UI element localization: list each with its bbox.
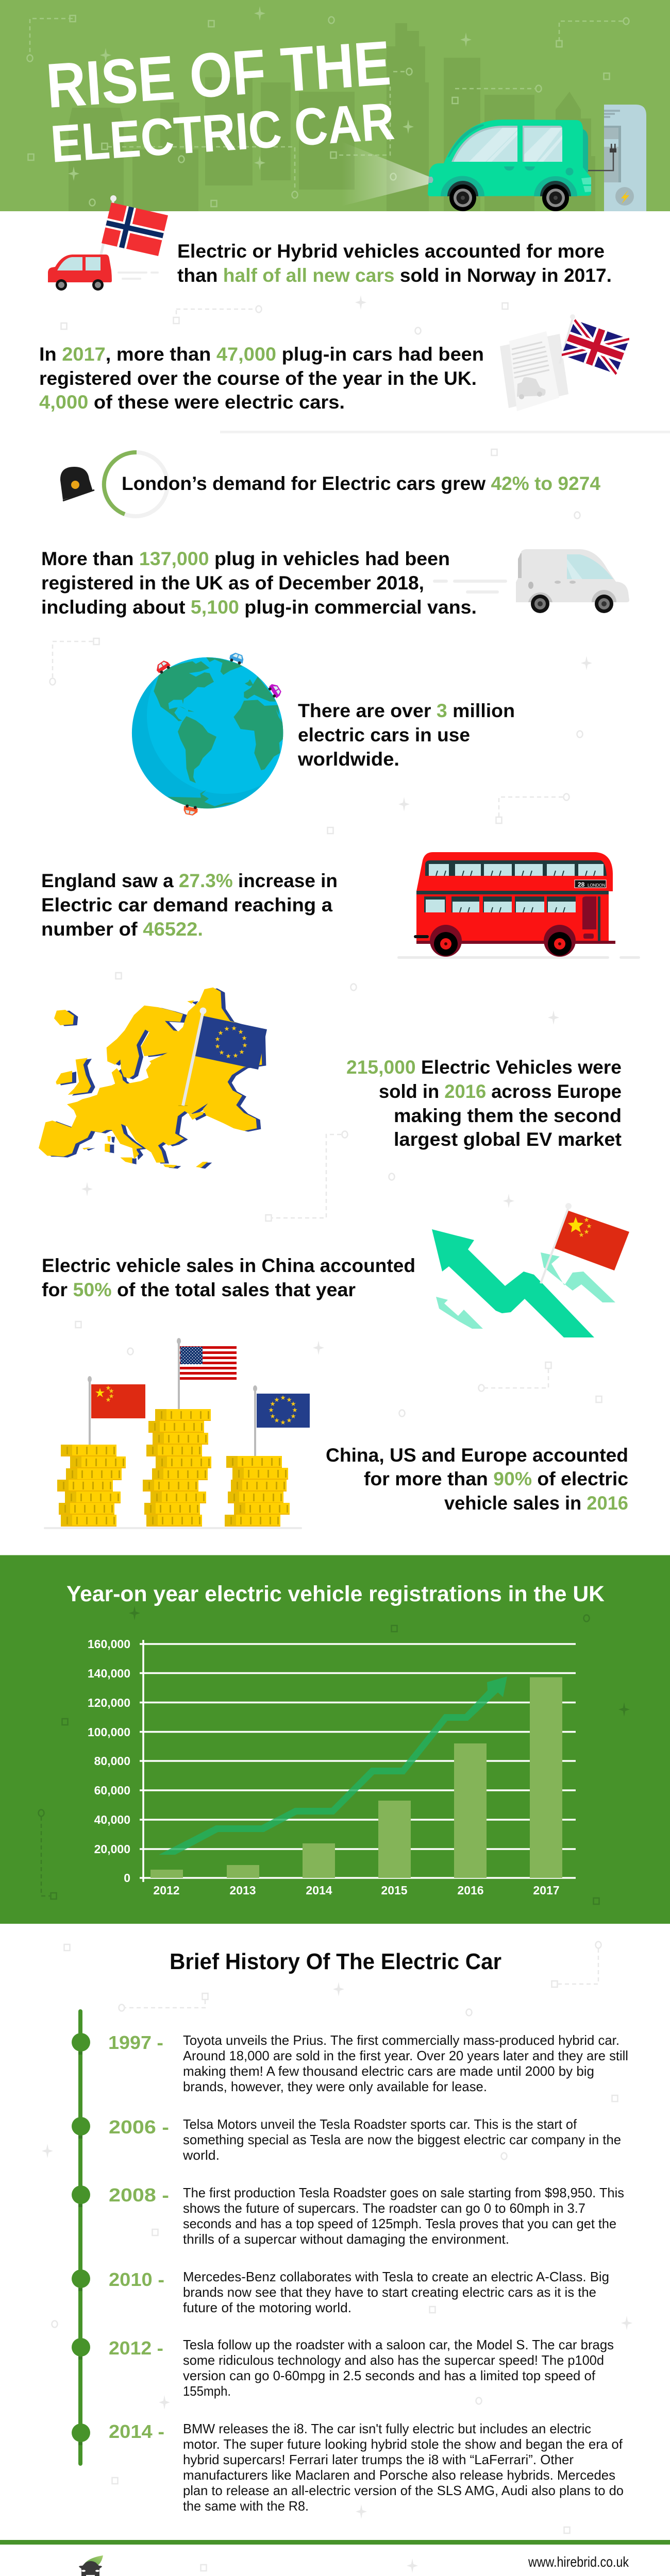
y axis labels: 0 bbox=[124, 1871, 130, 1885]
entry: 2006: world. bbox=[182, 2147, 220, 2163]
x axis labels: 2014 bbox=[306, 1884, 332, 1897]
entry: 1997: making them! A few thousand electric cars are made until 2000 by big bbox=[183, 2063, 594, 2079]
text: China statistic bbox=[42, 1255, 415, 1300]
entry: 2010: future of the motoring world. bbox=[183, 2300, 351, 2315]
panel: header banner bbox=[0, 0, 670, 211]
bus route sign: 28 bbox=[578, 881, 585, 888]
city skyline silhouette bbox=[69, 23, 595, 211]
entry: 1997: brands, however, they were only available for lease. bbox=[183, 2079, 487, 2094]
y axis labels: 100,000 bbox=[88, 1725, 130, 1739]
text: UK plug-in statistic: 4,000 of these were electric cars. bbox=[39, 392, 345, 413]
text: plug-in vehicle statistic: registered in the UK as of December 2018, bbox=[41, 572, 424, 594]
speed lines bbox=[433, 580, 507, 594]
text: China statistic: for 50% of the total sales that year bbox=[42, 1279, 356, 1300]
entry: 1997 bbox=[108, 2032, 628, 2094]
speed lines bbox=[118, 272, 159, 280]
website url: www.hirebrid.co.uk bbox=[528, 2554, 629, 2570]
text: plug-in vehicle statistic: including about 5,100 plug-in commercial vans. bbox=[41, 597, 477, 618]
entry: 2010: 2010 - bbox=[109, 2269, 164, 2290]
entry: 2012: some ridiculous technology and also has the supercar speed! The p100d bbox=[183, 2352, 604, 2368]
entry: 2014: BMW releases the i8. The car isn't fully electric but includes an electric bbox=[183, 2421, 591, 2436]
y axis labels: 140,000 bbox=[88, 1667, 130, 1680]
text: plug-in vehicle statistic bbox=[41, 548, 477, 618]
entry: 2014: hybrid supercars! Ferrari later trumps the i8 with “LaFerrari”. Other bbox=[183, 2452, 574, 2467]
bus route sign: LONDON bbox=[588, 883, 605, 888]
icon: EU flag on pole bbox=[178, 1008, 267, 1106]
entry: 2010 bbox=[109, 2269, 609, 2315]
x axis labels: 2017 bbox=[533, 1884, 560, 1897]
panel: history timeline bbox=[72, 1949, 628, 2514]
chart: 42% progress ring bbox=[104, 452, 167, 516]
entry: 2006 bbox=[109, 2116, 621, 2163]
heading: Brief History Of The Electric Car bbox=[170, 1949, 501, 1974]
icon: registration documents bbox=[500, 331, 568, 411]
icon: red car bbox=[48, 255, 112, 291]
text: Norway statistic bbox=[177, 241, 612, 286]
entry: 2006: 2006 - bbox=[109, 2116, 169, 2138]
icon: China flag on pole bbox=[541, 1203, 629, 1283]
entry: 2006: something special as Tesla are now the biggest electric car company in the bbox=[183, 2132, 621, 2147]
text: Norway statistic: than half of all new cars sold in Norway in 2017. bbox=[177, 265, 612, 286]
entry: 2012: 2012 - bbox=[109, 2337, 163, 2359]
text: England statistic: Electric car demand reaching a bbox=[41, 894, 332, 916]
entry: 2014: plan to release an all-electric version of the SLS AMG, Audi also plans to do bbox=[183, 2483, 624, 2498]
text: Europe statistic: largest global EV market bbox=[394, 1129, 622, 1150]
y axis labels: 120,000 bbox=[88, 1696, 130, 1709]
text: London statistic: London’s demand for Electric cars grew 42% to 9274 bbox=[122, 473, 600, 494]
logo: Hirebrid bbox=[45, 2555, 134, 2576]
x axis labels: 2012 bbox=[153, 1884, 180, 1897]
entry: 2012: 155mph. bbox=[183, 2383, 231, 2399]
entry: 2008: shows the future of supercars. The roadster can go 0 to 60mph in 3.7 bbox=[183, 2200, 585, 2216]
panel: China sales bbox=[42, 1203, 629, 1337]
text: worldwide statistic: electric cars in use bbox=[298, 724, 470, 745]
icon: electric car at charging station bbox=[428, 105, 646, 211]
entry: 2012: Tesla follow up the roadster with a saloon car, the Model S. The car brags bbox=[183, 2337, 614, 2352]
panel: footer bbox=[23, 2554, 629, 2576]
entry: 2014: motor. The super future looking hybrid stole the show and began the era of bbox=[183, 2436, 623, 2452]
entry: 2010: brands now see that they have to start creating electric cars as it is the bbox=[183, 2284, 596, 2300]
icon: Norway flag on pole bbox=[100, 195, 168, 257]
panel: worldwide electric cars bbox=[132, 637, 515, 816]
entry: 2012: version can go 0-60mpg in 2.5 seconds and has a limited top speed of bbox=[183, 2368, 596, 2383]
trend arrow bbox=[159, 1676, 507, 1855]
panel: UK registrations chart bbox=[0, 1555, 670, 1924]
entry: 2014: the same with the R8. bbox=[183, 2498, 309, 2514]
title: ELECTRIC CAR bbox=[49, 92, 396, 174]
panel: Europe sales bbox=[39, 988, 622, 1168]
ground line bbox=[44, 1527, 302, 1529]
text: worldwide statistic: There are over 3 million bbox=[298, 700, 515, 721]
entry: 2008 bbox=[109, 2184, 624, 2247]
text: global share statistic: vehicle sales in 2016 bbox=[444, 1493, 628, 1514]
y axis labels: 80,000 bbox=[94, 1754, 130, 1768]
text: Europe statistic: 215,000 Electric Vehicles were bbox=[346, 1057, 622, 1078]
entry: 2008: The first production Tesla Roadster goes on sale starting from $98,950. This bbox=[183, 2185, 624, 2200]
text: Norway statistic: Electric or Hybrid vehicles accounted for more bbox=[177, 241, 605, 262]
icon: white van bbox=[516, 549, 629, 613]
text: England statistic bbox=[41, 870, 338, 940]
timeline line and nodes bbox=[72, 2009, 90, 2466]
icon: UK flag on pole bbox=[560, 314, 629, 374]
entry: 1997: Toyota unveils the Prius. The first commercially mass-produced hybrid car. bbox=[183, 2032, 619, 2048]
text: Europe statistic bbox=[346, 1057, 622, 1150]
panel: body decorations bbox=[42, 295, 632, 2576]
text: global share statistic: for more than 90% of electric bbox=[364, 1468, 628, 1489]
x axis labels: 2015 bbox=[381, 1884, 408, 1897]
entry: 2014 bbox=[109, 2421, 624, 2514]
entry: 2008: seconds and has a top speed of 125mph. Tesla proves that you can get the bbox=[183, 2216, 616, 2231]
text: China statistic: Electric vehicle sales in China accounted bbox=[42, 1255, 415, 1276]
entry: 1997: Around 18,000 are sold in the first year. Over 20 years later and they are still bbox=[183, 2048, 628, 2063]
x axis labels bbox=[153, 1884, 560, 1897]
text: worldwide statistic: worldwide. bbox=[297, 749, 399, 770]
panel: plug-in vehicles and vans bbox=[41, 548, 629, 618]
text: UK plug-in statistic bbox=[39, 344, 484, 413]
bars bbox=[150, 1677, 562, 1878]
icon: EU flag bbox=[253, 1385, 310, 1456]
y axis labels bbox=[88, 1637, 130, 1885]
x axis labels: 2016 bbox=[457, 1884, 484, 1897]
panel: England demand bbox=[41, 852, 640, 959]
chart title: Year-on year electric vehicle registrations in the UK bbox=[66, 1582, 605, 1606]
panel: China US Europe share bbox=[44, 1338, 628, 1529]
text: Europe statistic: making them the second bbox=[394, 1105, 622, 1126]
icon: London double decker bus bbox=[397, 852, 640, 959]
x axis labels: 2013 bbox=[229, 1884, 256, 1897]
footer divider bar bbox=[0, 2540, 670, 2545]
bus route sign bbox=[575, 880, 606, 888]
title bbox=[44, 28, 396, 174]
text: global share statistic bbox=[326, 1445, 628, 1514]
icon: China flag bbox=[88, 1376, 145, 1445]
entry: 2008: 2008 - bbox=[109, 2184, 169, 2206]
text: UK plug-in statistic: registered over the course of the year in the UK. bbox=[39, 368, 477, 389]
y axis labels: 60,000 bbox=[94, 1784, 130, 1797]
icon: taxi roof light bbox=[60, 467, 94, 501]
entry: 1997: 1997 - bbox=[108, 2032, 163, 2053]
text: worldwide statistic bbox=[297, 700, 515, 770]
icon: rising arrows bbox=[432, 1229, 615, 1337]
icon: cars on globe bbox=[154, 651, 283, 816]
bar chart bbox=[88, 1637, 576, 1897]
icon: coin stacks bbox=[57, 1409, 290, 1527]
divider bar bbox=[220, 431, 670, 433]
panel: UK 2017 registrations bbox=[39, 314, 629, 413]
panel: London demand bbox=[60, 452, 600, 516]
entry: 2008: thrills of a supercar without damaging the environment. bbox=[183, 2231, 509, 2247]
text: England statistic: England saw a 27.3% increase in bbox=[41, 870, 338, 891]
y axis labels: 160,000 bbox=[88, 1637, 130, 1651]
entry: 2014: manufacturers like Maclaren and Porsche also release hybrids. Mercedes bbox=[183, 2467, 615, 2483]
entry: 2006: Telsa Motors unveil the Tesla Roadster sports car. This is the start of bbox=[183, 2116, 577, 2132]
map: Europe bbox=[39, 988, 266, 1168]
headlight beam bbox=[342, 142, 429, 206]
text: England statistic: number of 46522. bbox=[41, 919, 203, 940]
text: UK plug-in statistic: In 2017, more than 47,000 plug-in cars had been bbox=[39, 344, 484, 365]
icon: US flag bbox=[177, 1338, 237, 1409]
panel: Norway fact bbox=[48, 195, 612, 291]
title: RISE OF THE bbox=[44, 28, 393, 121]
entry: 2010: Mercedes-Benz collaborates with Tesla to create an electric A-Class. Big bbox=[183, 2269, 609, 2284]
text: global share statistic: China, US and Europe accounted bbox=[326, 1445, 628, 1466]
entry: 2012 bbox=[109, 2337, 614, 2399]
y axis labels: 40,000 bbox=[94, 1813, 130, 1826]
icon: globe bbox=[132, 657, 283, 809]
text: plug-in vehicle statistic: More than 137,000 plug in vehicles had been bbox=[41, 548, 450, 569]
entry: 2014: 2014 - bbox=[109, 2421, 164, 2442]
y axis labels: 20,000 bbox=[94, 1842, 130, 1856]
text: Europe statistic: sold in 2016 across Europe bbox=[379, 1081, 622, 1102]
